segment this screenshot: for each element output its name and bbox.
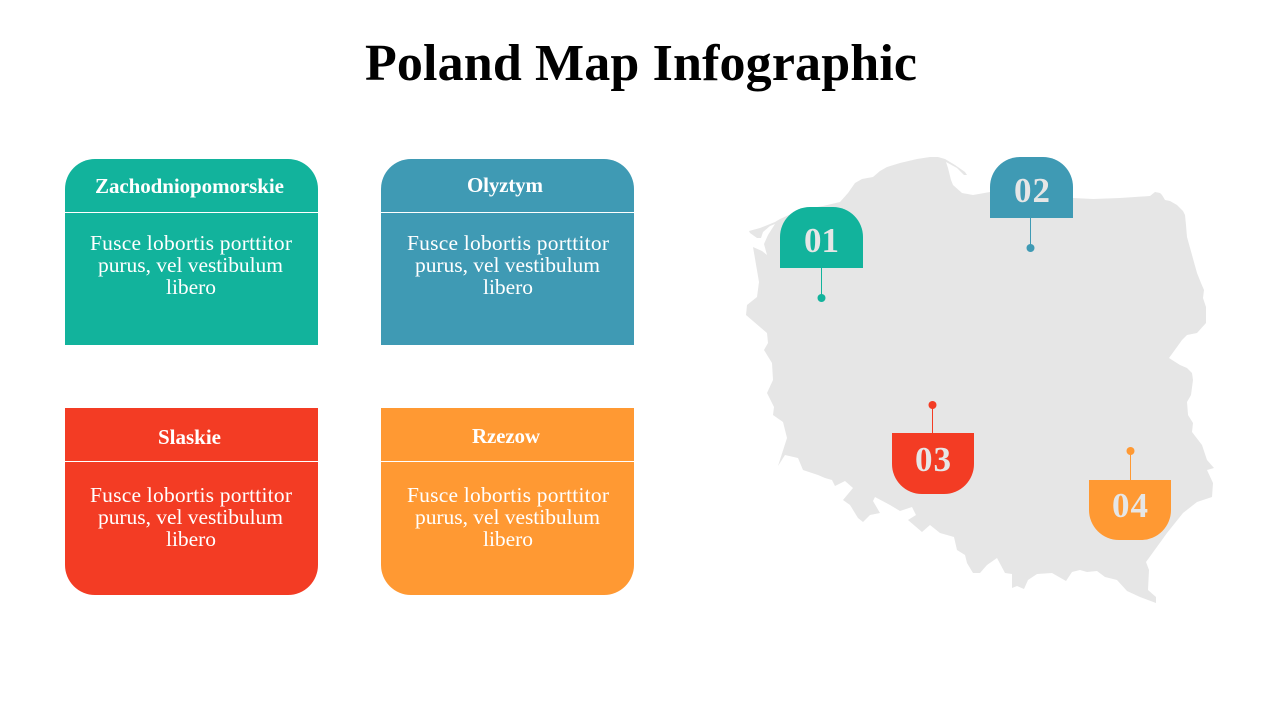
panel: Olyztym bbox=[381, 159, 634, 345]
card body text bbox=[90, 231, 292, 299]
card heading: Zachodniopomorskie bbox=[95, 174, 284, 198]
number 04: 04 bbox=[1112, 486, 1148, 525]
number 03: 03 bbox=[915, 440, 951, 479]
card heading: Olyztym bbox=[467, 173, 544, 197]
card body text: Fusce lobortis porttitor bbox=[407, 231, 609, 255]
card body text: libero bbox=[166, 275, 216, 299]
card body text bbox=[407, 483, 609, 551]
card body text: libero bbox=[483, 275, 533, 299]
card body text bbox=[407, 231, 609, 299]
card body text: Fusce lobortis porttitor bbox=[90, 483, 292, 507]
panel: Rzezow bbox=[381, 408, 634, 595]
card body text: Fusce lobortis porttitor bbox=[407, 483, 609, 507]
panel: Zachodniopomorskie bbox=[65, 159, 318, 345]
card heading: Rzezow bbox=[472, 424, 541, 448]
card background red bbox=[65, 408, 318, 595]
map of Poland bbox=[746, 157, 1214, 603]
card body text bbox=[90, 483, 292, 551]
card background blue bbox=[381, 159, 634, 345]
number 02: 02 bbox=[1014, 171, 1050, 210]
card body text: Fusce lobortis porttitor bbox=[90, 231, 292, 255]
card body text: purus, vel vestibulum bbox=[98, 505, 283, 529]
card body text: libero bbox=[166, 527, 216, 551]
card body text: purus, vel vestibulum bbox=[415, 253, 600, 277]
number 01: 01 bbox=[804, 221, 839, 260]
marker 01 bbox=[780, 207, 863, 302]
card background teal bbox=[65, 159, 318, 345]
panel: Slaskie bbox=[65, 408, 318, 595]
card body text: purus, vel vestibulum bbox=[415, 505, 600, 529]
marker 03 bbox=[892, 401, 974, 494]
card body text: libero bbox=[483, 527, 533, 551]
card background orange bbox=[381, 408, 634, 595]
marker 02 bbox=[990, 157, 1073, 252]
card body text: purus, vel vestibulum bbox=[98, 253, 283, 277]
card heading: Slaskie bbox=[158, 425, 221, 449]
title: Poland Map Infographic bbox=[365, 35, 917, 92]
marker 04 bbox=[1089, 447, 1171, 540]
